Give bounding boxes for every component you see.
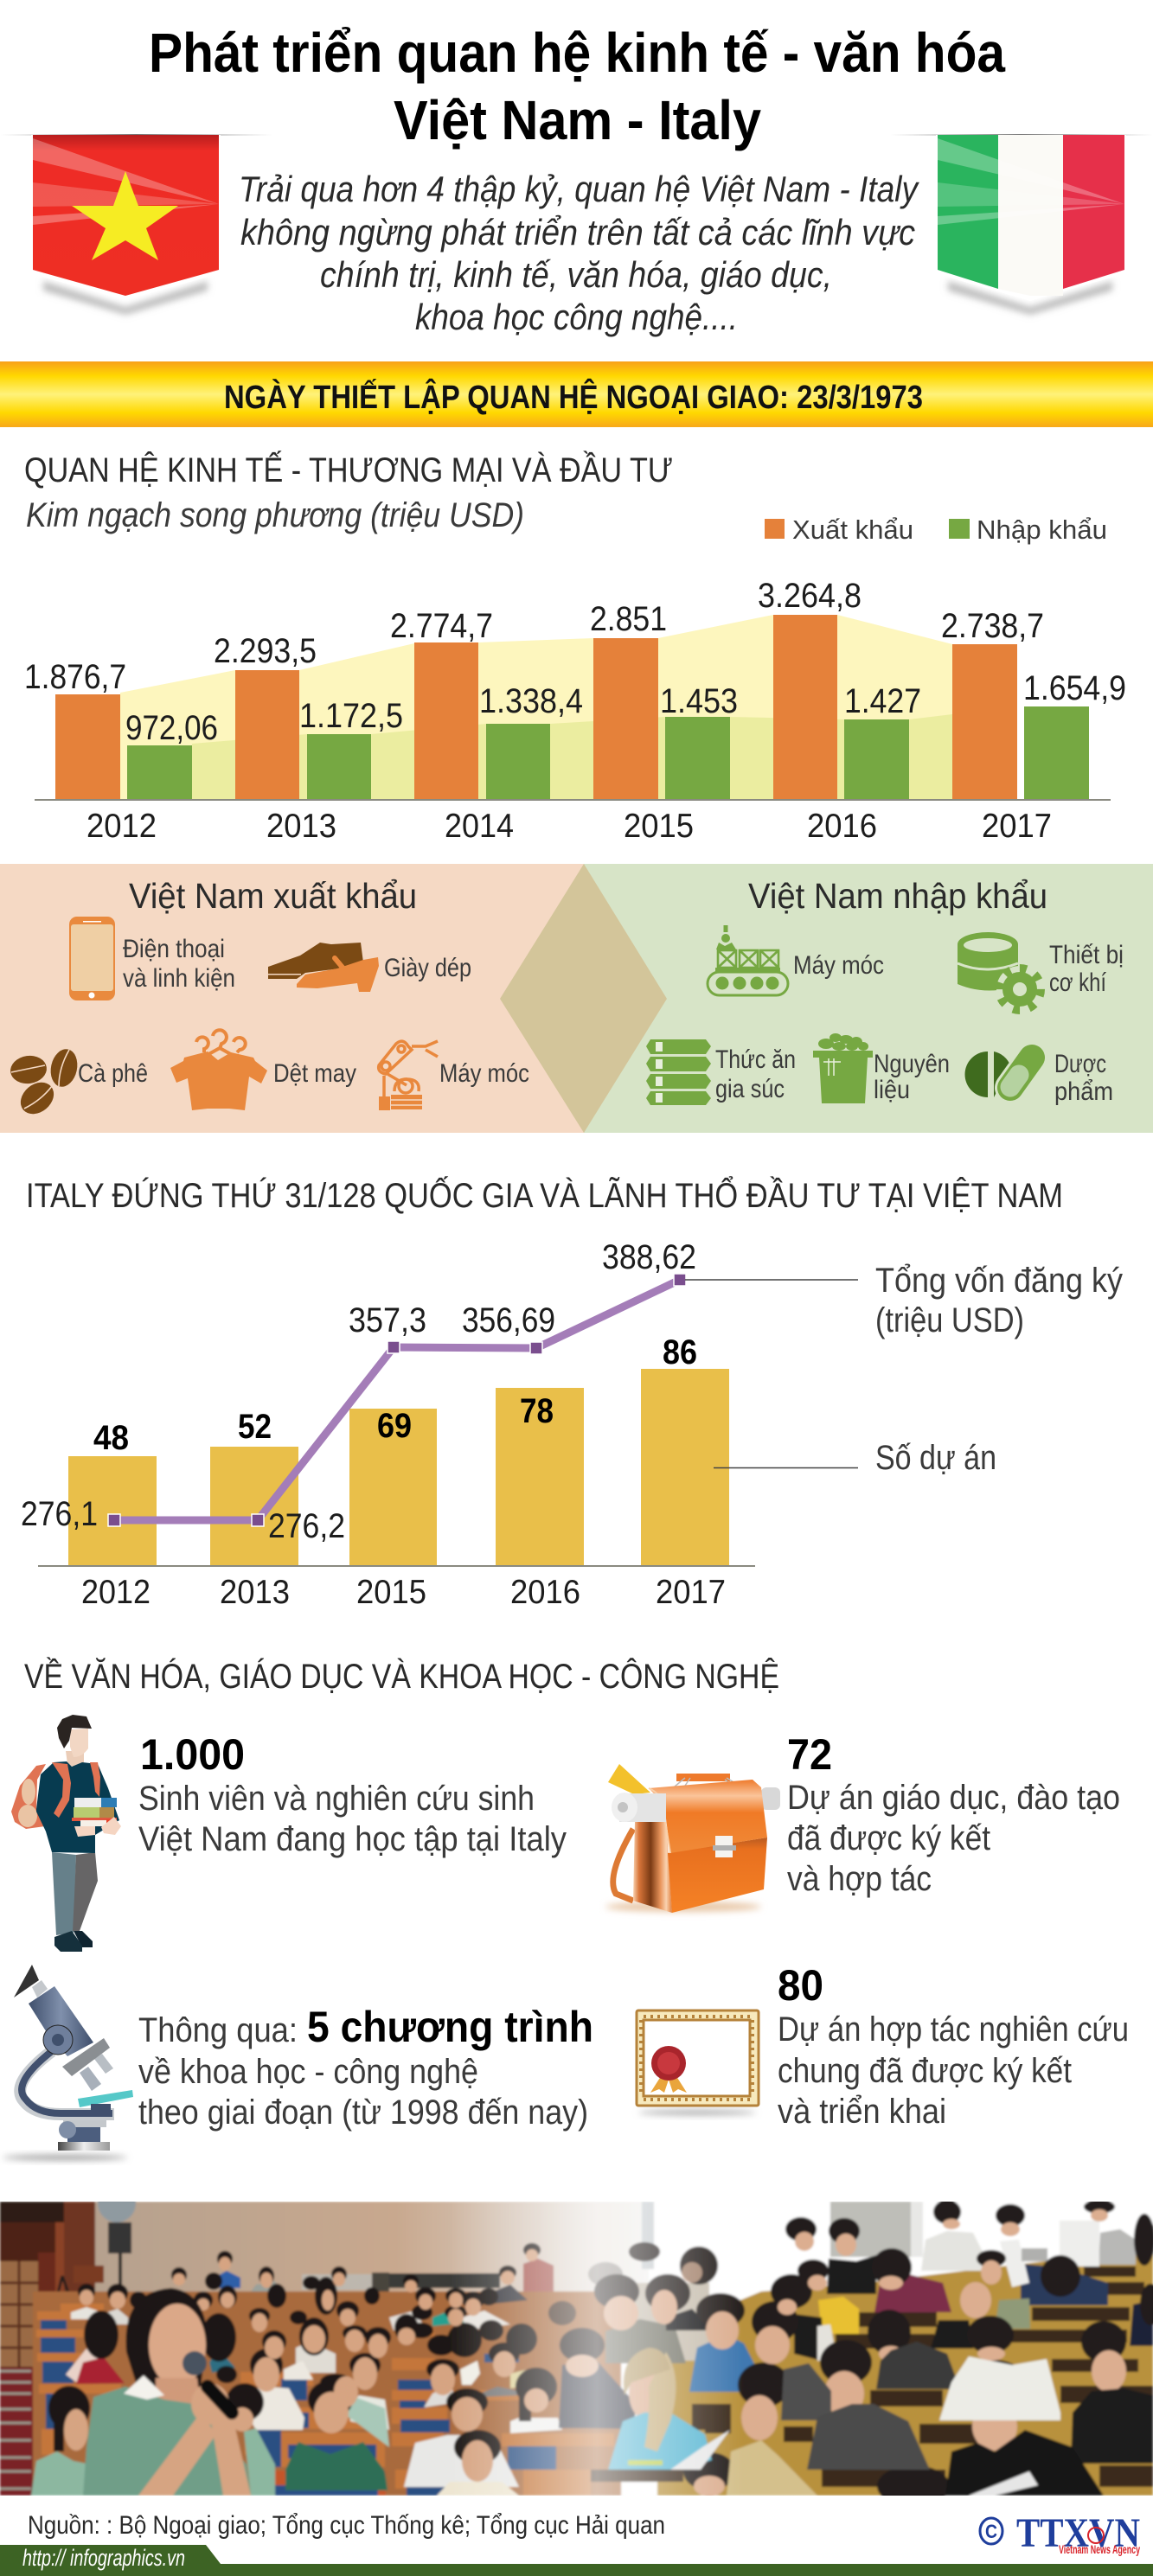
combo chart: investment capital and projects: 2016 xyxy=(510,1574,580,1611)
text: joint research projects: và triển khai xyxy=(778,2093,946,2131)
bar chart: exports and imports 2012-2017: 2.851 xyxy=(590,600,667,638)
label: raw materials: liệu xyxy=(874,1076,910,1104)
text: science programmes: Thông qua: xyxy=(138,2011,298,2049)
icon: microscope xyxy=(3,1965,133,2160)
right hall back rows xyxy=(559,2221,1153,2429)
icon: pills xyxy=(965,1051,1032,1097)
text: education projects: 72 xyxy=(787,1730,832,1779)
label: mechanical equipment: Thiết bị xyxy=(1049,941,1124,969)
banner: date of diplomatic relations xyxy=(0,361,1153,427)
label: pharmaceuticals: Dược xyxy=(1054,1050,1106,1078)
flag: Italy xyxy=(890,134,1153,315)
combo chart: investment capital and projects: Tổng vốn đăng ký xyxy=(875,1262,1123,1300)
heading: economic relations: QUAN HỆ KINH TẾ - THƯƠNG MẠI VÀ ĐẦU TƯ xyxy=(24,450,673,489)
bar chart: exports and imports 2012-2017: 1.876,7 xyxy=(24,658,126,696)
bar chart: exports and imports 2012-2017: 2015 xyxy=(624,808,694,845)
label: animal feed xyxy=(715,1045,796,1103)
text: students: Sinh viên và nghiên cứu sinh xyxy=(138,1780,535,1818)
icon: robot arm xyxy=(379,1041,438,1110)
label: animal feed: Thức ăn xyxy=(715,1045,796,1074)
text: students: 1.000 xyxy=(140,1730,245,1779)
subtitle: bilateral turnover: Kim ngạch song phương (triệu USD) xyxy=(26,496,524,534)
label: mechanical equipment xyxy=(1049,941,1124,997)
icon: certificate xyxy=(637,2010,759,2115)
combo chart: investment capital and projects: 52 xyxy=(238,1408,272,1446)
combo chart: investment capital and projects: 276,2 xyxy=(268,1507,345,1545)
combo chart: investment capital and projects: 86 xyxy=(663,1333,697,1371)
title: Việt Nam - Italy xyxy=(394,89,761,151)
icon: conveyor xyxy=(708,925,788,995)
label: machinery export: Máy móc xyxy=(439,1059,529,1088)
front seat xyxy=(261,2471,386,2496)
intro text: chính trị, kinh tế, văn hóa, giáo dục, xyxy=(320,254,832,295)
label: mechanical equipment: cơ khí xyxy=(1049,968,1107,997)
woman with microphone xyxy=(83,2288,251,2496)
banner: date of diplomatic relations: NGÀY THIẾT LẬP QUAN HỆ NGOẠI GIAO: 23/3/1973 xyxy=(224,378,923,416)
audience shirts xyxy=(31,2259,562,2496)
right hall hair xyxy=(548,2200,1153,2507)
combo chart: investment capital and projects: 2017 xyxy=(656,1574,726,1611)
intro text xyxy=(239,169,920,337)
label: raw materials: Nguyên xyxy=(874,1050,950,1078)
audience faces xyxy=(64,2249,548,2482)
bar chart: exports and imports 2012-2017: 2014 xyxy=(445,808,514,845)
combo chart: investment capital and projects: (triệu USD) xyxy=(875,1301,1024,1339)
intro text: không ngừng phát triển trên tất cả các lĩnh vực xyxy=(240,212,915,252)
combo chart: investment capital and projects: 69 xyxy=(377,1407,412,1445)
label: textiles: Dệt may xyxy=(273,1059,356,1088)
text: science programmes: 5 chương trình xyxy=(307,2003,593,2051)
text: education projects: đã được ký kết xyxy=(787,1819,990,1857)
bar chart: exports and imports 2012-2017: 972,06 xyxy=(125,709,218,747)
label: pharmaceuticals: phẩm xyxy=(1054,1077,1113,1106)
icon: animal feed stack xyxy=(646,1039,711,1105)
bar chart: exports and imports 2012-2017: 2.738,7 xyxy=(941,607,1044,645)
heading: culture, education, science: VỀ VĂN HÓA, GIÁO DỤC VÀ KHOA HỌC - CÔNG NGHỆ xyxy=(24,1656,779,1696)
combo chart: investment capital and projects: Số dự án xyxy=(875,1439,996,1477)
label: animal feed: gia súc xyxy=(715,1075,785,1103)
label: coffee: Cà phê xyxy=(78,1059,148,1088)
combo chart: investment capital and projects: 2013 xyxy=(220,1574,290,1611)
combo chart: investment capital and projects: 356,69 xyxy=(462,1301,555,1339)
text: joint research projects xyxy=(778,1961,1129,2131)
bar chart: exports and imports 2012-2017: 2.774,7 xyxy=(390,607,493,645)
combo chart: investment capital and projects: 2012 xyxy=(81,1574,151,1611)
heading: Vietnam exports: Việt Nam xuất khẩu xyxy=(129,876,417,916)
bar chart: exports and imports 2012-2017: 2012 xyxy=(86,808,157,845)
label: machinery import: Máy móc xyxy=(793,951,884,980)
icon: coffee beans xyxy=(9,1046,80,1121)
text: students xyxy=(138,1730,567,1858)
legend: Nhập khẩu xyxy=(977,515,1107,545)
bar chart: exports and imports 2012-2017 xyxy=(24,577,1126,845)
intro text: khoa học công nghệ.... xyxy=(415,297,738,337)
text: students: Việt Nam đang học tập tại Italy xyxy=(138,1820,567,1858)
icon: disk and gear xyxy=(958,932,1043,1013)
source note: Nguồn: : Bộ Ngoại giao; Tổng cục Thống kê; Tổng cục Hải quan xyxy=(28,2511,665,2540)
bar chart: exports and imports 2012-2017: 2013 xyxy=(266,808,336,845)
label: footwear: Giày dép xyxy=(384,954,471,982)
bar chart: exports and imports 2012-2017: 1.654,9 xyxy=(1023,669,1126,707)
text: education projects: và hợp tác xyxy=(787,1860,932,1898)
right hall faces xyxy=(566,2209,1126,2496)
combo chart: investment capital and projects: 48 xyxy=(93,1419,129,1457)
combo chart: investment capital and projects: 276,1 xyxy=(21,1495,98,1533)
bar chart: exports and imports 2012-2017: 2016 xyxy=(807,808,877,845)
text: joint research projects: chung đã được ký kết xyxy=(778,2052,1072,2090)
footer bar with website: http:// infographics.vn xyxy=(22,2545,185,2571)
label: phones xyxy=(123,935,235,993)
text: education projects: Dự án giáo dục, đào tạo xyxy=(787,1779,1120,1817)
combo chart: investment capital and projects xyxy=(21,1238,1123,1611)
combo chart: investment capital and projects: 388,62 xyxy=(602,1238,696,1276)
bar chart: exports and imports 2012-2017: 1.172,5 xyxy=(299,697,403,735)
icon: shirt with hangers xyxy=(170,1030,267,1110)
combo chart: investment capital and projects: 2015 xyxy=(356,1574,426,1611)
combo chart: investment capital and projects: 78 xyxy=(520,1392,554,1430)
icon: shoes xyxy=(268,943,379,992)
audience hair xyxy=(48,2243,557,2464)
label: phones: Điện thoại xyxy=(123,935,225,963)
combo chart: investment capital and projects: 357,3 xyxy=(349,1301,426,1339)
label: raw materials xyxy=(874,1050,950,1104)
flag: Vietnam xyxy=(0,134,272,315)
footer bar with website xyxy=(0,2545,1153,2576)
photo collage: students in lecture halls xyxy=(0,2184,1153,2507)
label: phones: và linh kiện xyxy=(123,964,235,993)
panel: exports and imports of Vietnam xyxy=(0,864,1153,1133)
bar chart: exports and imports 2012-2017: 1.427 xyxy=(844,682,921,720)
icon: briefcase xyxy=(605,1764,780,1913)
icon: raw materials bucket xyxy=(813,1033,873,1103)
bar chart: exports and imports 2012-2017: 2017 xyxy=(982,808,1052,845)
label: pharmaceuticals xyxy=(1054,1050,1113,1106)
title: Phát triển quan hệ kinh tế - văn hóa xyxy=(149,22,1005,84)
right hall front rows xyxy=(608,2342,1153,2496)
title xyxy=(149,22,1005,151)
bar chart: exports and imports 2012-2017: 1.453 xyxy=(660,682,738,720)
legend: Xuất khẩu xyxy=(792,515,913,545)
text: education projects xyxy=(787,1730,1120,1898)
bar chart: exports and imports 2012-2017: 2.293,5 xyxy=(214,632,317,670)
logo: TTXVN: C xyxy=(985,2521,997,2542)
bar chart: exports and imports 2012-2017: 1.338,4 xyxy=(479,682,583,720)
intro text: Trải qua hơn 4 thập kỷ, quan hệ Việt Nam - Italy xyxy=(239,169,920,209)
heading: Vietnam imports: Việt Nam nhập khẩu xyxy=(748,876,1047,916)
legend xyxy=(765,515,1107,545)
icon: student xyxy=(11,1715,121,1952)
text: science programmes: về khoa học - công nghệ xyxy=(138,2053,478,2091)
text: joint research projects: 80 xyxy=(778,1961,823,2010)
text: science programmes xyxy=(138,2003,593,2132)
icon: phone xyxy=(69,917,115,1000)
text: science programmes: theo giai đoạn (từ 1998 đến nay) xyxy=(138,2093,588,2132)
bar chart: exports and imports 2012-2017: 3.264,8 xyxy=(758,577,862,615)
